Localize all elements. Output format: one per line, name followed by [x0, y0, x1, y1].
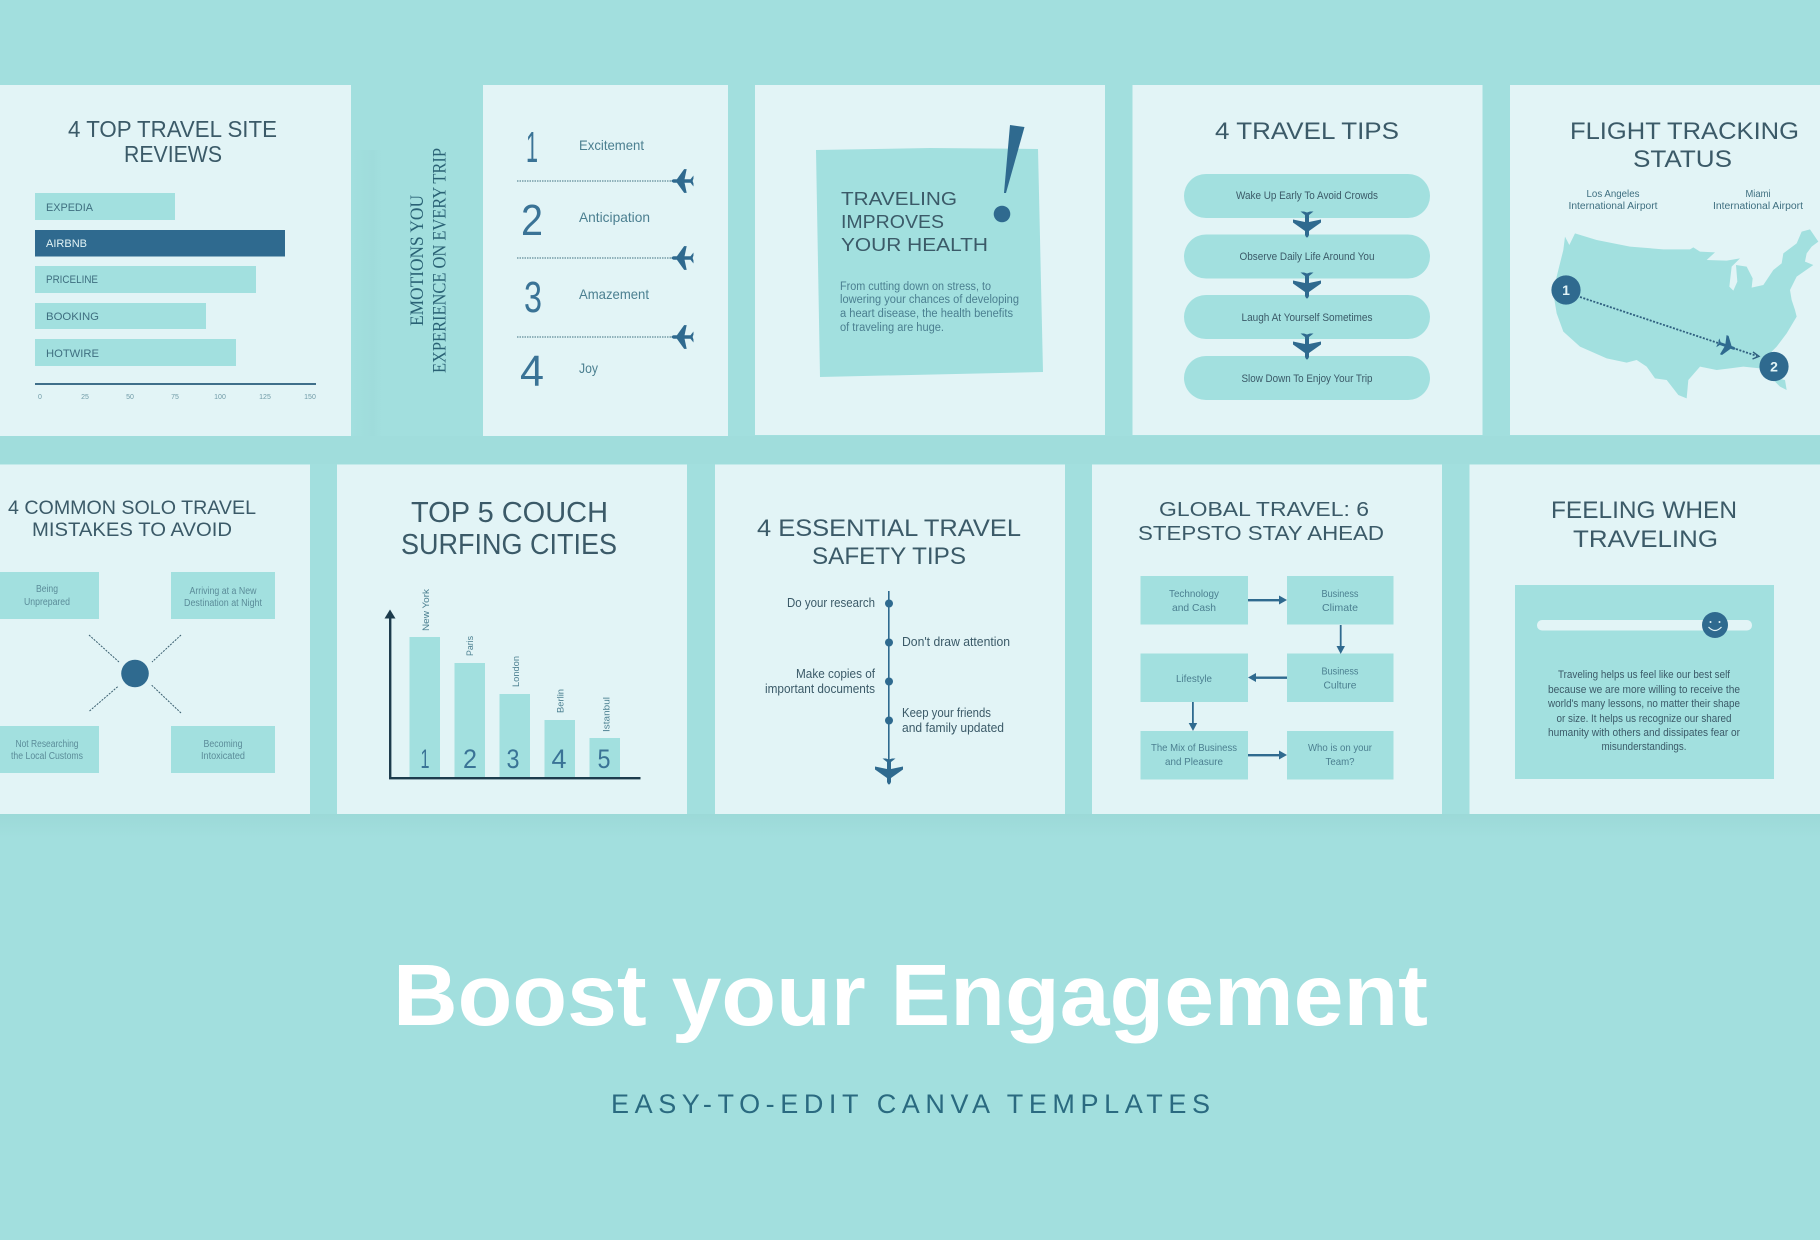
- marker 2: 2: [1770, 358, 1778, 374]
- mistake box: becoming intoxicated: Becoming: [204, 739, 242, 750]
- bar chart: cities: 3: [506, 744, 520, 774]
- heading: flight tracking status: FLIGHT TRACKING: [1570, 118, 1799, 145]
- timeline tips: Keep your friends: [902, 705, 991, 720]
- bar chart: site reviews: 100: [214, 394, 226, 401]
- heading: global travel steps: [1138, 498, 1384, 545]
- heading: 4 travel tips: 4 TRAVEL TIPS: [1215, 118, 1399, 145]
- heading: top travel site reviews: [68, 116, 277, 167]
- flow boxes: Culture: [1324, 680, 1357, 692]
- numbers: 4: [520, 347, 544, 396]
- heading: traveling improves your health: IMPROVES: [841, 212, 944, 232]
- tip pills: [1184, 174, 1430, 400]
- panel: flight tracking status: [1510, 85, 1820, 435]
- airport labels: [1568, 189, 1803, 212]
- mistake box: arriving at night: Destination at Night: [184, 598, 262, 609]
- bar chart: cities: 5: [598, 744, 610, 774]
- emotion labels: Amazement: [579, 286, 649, 302]
- flow boxes: Business: [1322, 588, 1358, 600]
- mistake box: arriving at night: Arriving at a New: [190, 586, 257, 597]
- center hub with dashed spokes: [89, 635, 181, 713]
- heading: global travel steps: STEPSTO STAY AHEAD: [1138, 522, 1384, 545]
- timeline tips: [765, 595, 1010, 735]
- body text: From cutting down on stress, to: [840, 281, 991, 293]
- heading: essential travel safety tips: SAFETY TIPS: [812, 543, 966, 570]
- heading: traveling improves your health: TRAVELING: [841, 189, 957, 209]
- emotion labels: [579, 137, 650, 376]
- heading: feeling when traveling: [1551, 497, 1737, 553]
- tip pills: Wake Up Early To Avoid Crowds: [1236, 190, 1378, 202]
- numbers: 2: [521, 196, 543, 245]
- timeline tips: Don't draw attention: [902, 634, 1010, 649]
- heading: feeling when traveling: TRAVELING: [1573, 526, 1718, 553]
- heading: common solo travel mistakes: MISTAKES TO AVOID: [32, 520, 232, 541]
- body text: a heart disease, the health benefits: [840, 308, 1013, 320]
- bar chart: cities: London: [511, 656, 522, 687]
- mistake box: not researching: [0, 726, 99, 773]
- panel: 4 top travel site reviews: [0, 85, 351, 436]
- timeline tips: Make copies of: [796, 666, 875, 681]
- numbers: 1: [526, 123, 538, 172]
- airport labels: International Airport: [1713, 201, 1803, 212]
- panel: 4 essential travel safety tips: [715, 464, 1065, 814]
- tip pills: Laugh At Yourself Sometimes: [1242, 312, 1373, 324]
- body text: humanity with others and dissipates fear or: [1548, 727, 1740, 739]
- bar chart: cities: 2: [463, 744, 477, 774]
- flow boxes: Business: [1322, 666, 1358, 678]
- heading: top 5 couch surfing cities: [401, 497, 617, 561]
- heading: common solo travel mistakes: [8, 498, 256, 541]
- flow boxes: Lifestyle: [1176, 673, 1212, 685]
- panel: global travel 6 steps: [1092, 464, 1442, 814]
- bar chart: site reviews: HOTWIRE: [46, 348, 99, 360]
- heading: emotions you experience on every trip: [407, 148, 450, 373]
- note shape: [816, 148, 1043, 377]
- icon: exclamation mark: [994, 125, 1024, 222]
- mistake box: becoming intoxicated: Intoxicated: [201, 751, 245, 762]
- flow boxes: and Pleasure: [1165, 756, 1223, 768]
- heading: top 5 couch surfing cities: SURFING CITIES: [401, 529, 617, 561]
- flow boxes: and Cash: [1172, 602, 1216, 614]
- bar chart: cities: Paris: [465, 636, 476, 656]
- body text: or size. It helps us recognize our shared: [1556, 713, 1732, 725]
- content box: [1515, 585, 1774, 779]
- airport labels: Miami: [1746, 189, 1770, 200]
- panel: 4 travel tips: [1132, 85, 1482, 435]
- map: united states: [1553, 229, 1818, 398]
- heading: common solo travel mistakes: 4 COMMON SOLO TRAVEL: [8, 498, 256, 519]
- mistake box: not researching: Not Researching: [16, 739, 78, 750]
- body text: lowering your chances of developing: [840, 294, 1019, 306]
- flow arrows: [1189, 596, 1345, 760]
- heading: traveling improves your health: [841, 189, 988, 255]
- mistake box: becoming intoxicated: [171, 726, 275, 773]
- emotion labels: Excitement: [579, 137, 644, 153]
- mistake box: not researching: the Local Customs: [11, 751, 83, 762]
- timeline tips: Do your research: [787, 595, 875, 610]
- bar chart: site reviews: 75: [171, 394, 179, 401]
- heading: top travel site reviews: 4 TOP TRAVEL SITE: [68, 116, 277, 142]
- heading: essential travel safety tips: 4 ESSENTIAL TRAVEL: [757, 515, 1021, 542]
- bar chart: site reviews: PRICELINE: [46, 274, 98, 286]
- bar chart: site reviews: 150: [304, 394, 316, 401]
- bar chart: site reviews: BOOKING: [46, 311, 99, 323]
- body text: because we are more willing to receive the: [1548, 684, 1740, 696]
- airport labels: International Airport: [1568, 201, 1658, 212]
- bar chart: cities: Berlin: [556, 689, 566, 713]
- bar chart: site reviews: [35, 193, 316, 401]
- body text: Traveling helps us feel like our best self: [1558, 669, 1731, 681]
- flow boxes: Technology: [1169, 588, 1220, 600]
- heading: essential travel safety tips: [757, 515, 1021, 570]
- mistake box: being unprepared: [0, 572, 99, 619]
- bar chart: cities: [384, 589, 640, 779]
- heading: top travel site reviews: REVIEWS: [124, 141, 222, 167]
- bar chart: site reviews: 0: [38, 394, 42, 401]
- bar chart: cities: New York: [421, 589, 432, 631]
- plane connectors: [1293, 212, 1321, 360]
- flight path: [1580, 297, 1759, 359]
- numbers: [520, 123, 544, 396]
- dotted flight lines with planes: [517, 169, 693, 349]
- panel: feeling when traveling: [1470, 464, 1820, 814]
- airport labels: Los Angeles: [1586, 189, 1640, 200]
- heading: top 5 couch surfing cities: TOP 5 COUCH: [411, 497, 608, 529]
- mistake box: being unprepared: Being: [36, 584, 58, 595]
- bar chart: site reviews: 125: [259, 394, 271, 401]
- numbers: 3: [524, 273, 542, 322]
- mistake box: being unprepared: Unprepared: [24, 597, 70, 608]
- subtitle: EASY-TO-EDIT CANVA TEMPLATES: [611, 1089, 1210, 1119]
- mistake box: arriving at night: [171, 572, 275, 619]
- heading: flight tracking status: [1570, 118, 1799, 173]
- timeline with plane: [875, 591, 903, 784]
- emotion labels: Joy: [579, 360, 598, 376]
- tip pills: Slow Down To Enjoy Your Trip: [1242, 373, 1372, 385]
- flow boxes: Who is on your: [1308, 742, 1372, 754]
- bar chart: cities: 1: [420, 744, 430, 774]
- heading: emotions you experience on every trip: EXPERIENCE ON EVERY TRIP: [430, 148, 450, 373]
- bar chart: site reviews: AIRBNB: [46, 238, 87, 250]
- heading: flight tracking status: STATUS: [1633, 146, 1732, 173]
- panel: top 5 couch surfing cities: [337, 464, 687, 814]
- heading: global travel steps: GLOBAL TRAVEL: 6: [1159, 498, 1369, 521]
- body text: [840, 281, 1019, 334]
- body text: world's many lessons, no matter their shape: [1547, 698, 1740, 710]
- body text: misunderstandings.: [1602, 741, 1686, 753]
- bar chart: cities: 4: [552, 744, 566, 774]
- bar chart: site reviews: 25: [81, 394, 89, 401]
- heading: emotions you experience on every trip: EMOTIONS YOU: [407, 195, 428, 326]
- timeline tips: important documents: [765, 681, 875, 696]
- timeline tips: and family updated: [902, 720, 1004, 735]
- marker 2: [1759, 352, 1789, 381]
- marker 1: [1551, 275, 1581, 305]
- bar chart: cities: Istanbul: [602, 697, 612, 732]
- tip pills: Observe Daily Life Around You: [1240, 251, 1374, 263]
- panel: 4 common solo travel mistakes: [0, 464, 310, 814]
- body text: [1547, 669, 1740, 753]
- bar chart: site reviews: EXPEDIA: [46, 202, 94, 214]
- heading: traveling improves your health: YOUR HEALTH: [841, 235, 988, 255]
- emotion labels: Anticipation: [579, 209, 650, 225]
- flow boxes: The Mix of Business: [1151, 742, 1237, 754]
- body text: of traveling are huge.: [840, 322, 944, 334]
- slider with smiley knob: [1537, 612, 1752, 638]
- panel: traveling improves your health: [755, 85, 1105, 435]
- marker 1: 1: [1562, 282, 1570, 298]
- flow boxes: Team?: [1326, 756, 1355, 768]
- flow boxes: Climate: [1322, 602, 1358, 614]
- bar chart: site reviews: 50: [126, 394, 134, 401]
- panel: emotions list: [483, 85, 728, 436]
- flow boxes: [1140, 576, 1394, 780]
- heading: feeling when traveling: FEELING WHEN: [1551, 497, 1737, 524]
- title: Boost your Engagement: [393, 947, 1428, 1044]
